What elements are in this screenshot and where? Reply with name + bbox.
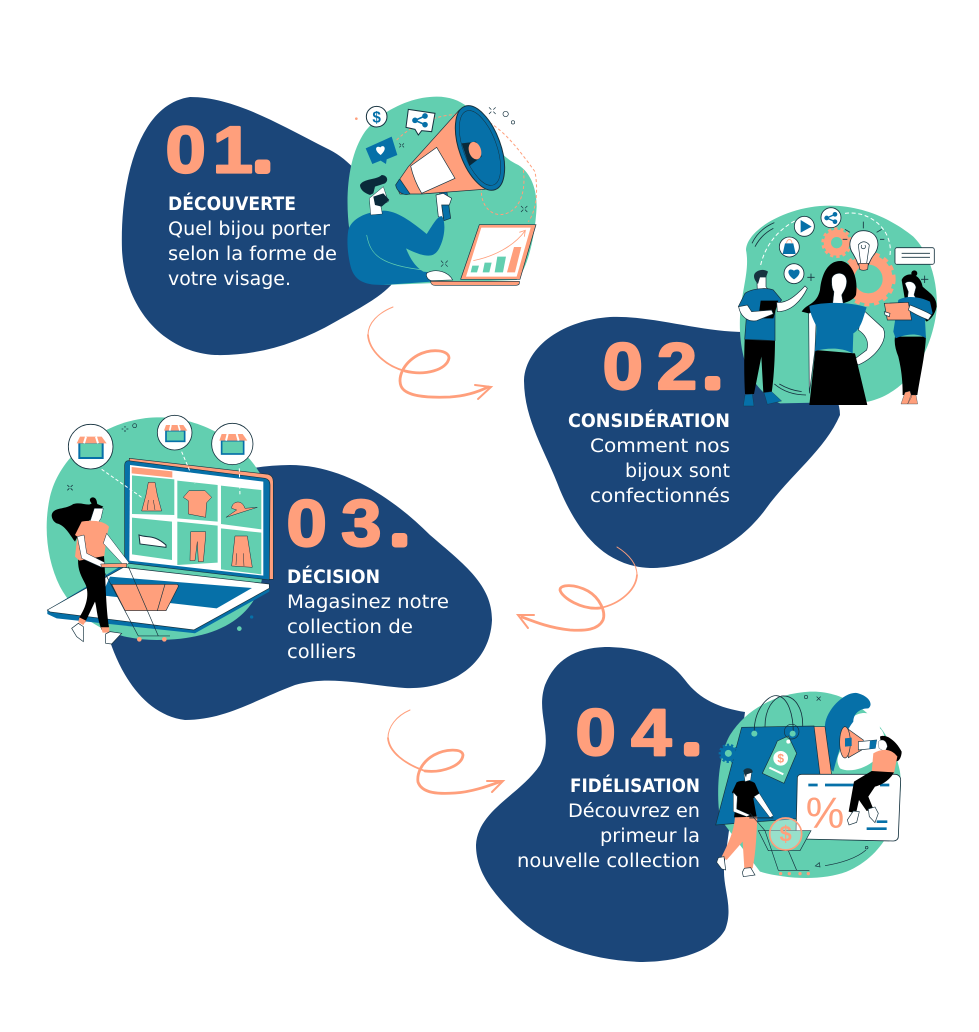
number 01: 0	[166, 113, 206, 187]
heading découverte: DÉCOUVERTE	[168, 193, 296, 215]
heading fidélisation: FIDÉLISATION	[570, 775, 700, 797]
coupon card: %	[806, 790, 844, 838]
green backdrop	[740, 206, 937, 403]
woman with megaphone	[840, 727, 902, 825]
marketer	[347, 175, 453, 285]
panel: 03 décision blob	[108, 465, 492, 720]
decorative strokes	[761, 213, 890, 265]
number 03: .	[392, 499, 407, 555]
description 03: collection de	[287, 617, 413, 638]
number 02: 0	[603, 329, 643, 403]
man with tablet	[738, 270, 807, 406]
text block: 04	[517, 695, 700, 872]
illustration: team and ideas	[738, 206, 937, 406]
illustration: loyalty promotion	[716, 692, 902, 878]
central woman	[802, 261, 884, 405]
icon: light bulb	[843, 222, 884, 270]
description 02: confectionnés	[590, 486, 730, 507]
number 02: 2	[657, 329, 697, 403]
dashed path	[397, 114, 537, 222]
price tag: $	[777, 752, 784, 766]
laptop chart	[431, 225, 536, 285]
icon: share bubble	[406, 109, 435, 135]
blue gear	[720, 745, 737, 762]
basket with coin	[750, 813, 811, 875]
description 03: Magasinez notre	[287, 592, 449, 613]
green backdrop	[348, 97, 537, 285]
icon: dollar badge	[366, 106, 387, 127]
store badges	[68, 415, 253, 497]
product thumbnails	[139, 482, 257, 567]
number 04: 4	[631, 695, 672, 769]
panel: 02 considération blob	[524, 317, 840, 568]
basket with coin: $	[780, 822, 792, 847]
description 02: Comment nos	[590, 436, 730, 457]
gears	[823, 229, 894, 304]
number 04: .	[684, 708, 699, 764]
icon: heart bubble	[366, 137, 397, 164]
coupon card	[796, 774, 901, 841]
icons: round social badges	[779, 208, 841, 284]
white cloud	[837, 713, 884, 770]
description 01: selon la forme de	[168, 244, 337, 265]
text block: 02	[568, 329, 730, 507]
arrow: 02 to 03	[518, 547, 637, 630]
text block: 01	[166, 113, 337, 290]
heading considération: CONSIDÉRATION	[568, 410, 730, 432]
illustration: online store on laptop	[47, 415, 273, 644]
shopper	[717, 768, 773, 877]
small marks	[804, 695, 868, 867]
illustration: megaphone and marketer	[347, 97, 537, 285]
description 04: primeur la	[600, 826, 700, 847]
number 02: .	[705, 342, 720, 398]
icon: dollar badge: $	[372, 109, 381, 126]
laptop base	[47, 567, 269, 633]
panel: 01 découverte blob	[122, 97, 400, 355]
shopper with cart	[52, 497, 178, 644]
panel: 04 fidélisation blob	[476, 647, 745, 962]
text block: 03	[287, 486, 449, 663]
description 03: colliers	[287, 642, 356, 663]
description 02: bijoux sont	[625, 461, 730, 482]
number 04: 0	[576, 695, 616, 769]
note card	[895, 248, 934, 264]
number 01: .	[255, 126, 270, 182]
small marks	[67, 424, 253, 631]
number 03: 0	[287, 486, 327, 560]
woman with tablet	[884, 270, 937, 404]
shopping bag	[716, 696, 832, 825]
price tag	[762, 724, 799, 783]
sparkle marks	[399, 107, 527, 267]
number 03: 3	[341, 486, 381, 560]
heading décision: DÉCISION	[287, 566, 380, 588]
arrow: 01 to 02	[368, 307, 491, 399]
megaphone	[396, 99, 515, 221]
description 01: votre visage.	[168, 269, 291, 290]
arrow: 03 to 04	[388, 710, 503, 793]
description 01: Quel bijou porter	[168, 219, 330, 240]
laptop screen	[125, 458, 273, 580]
green backdrop	[718, 692, 901, 878]
number 01: 1	[213, 113, 253, 187]
blue leaf	[824, 693, 871, 772]
description 04: Découvrez en	[568, 801, 700, 822]
description 04: nouvelle collection	[517, 851, 700, 872]
green backdrop	[47, 417, 263, 640]
